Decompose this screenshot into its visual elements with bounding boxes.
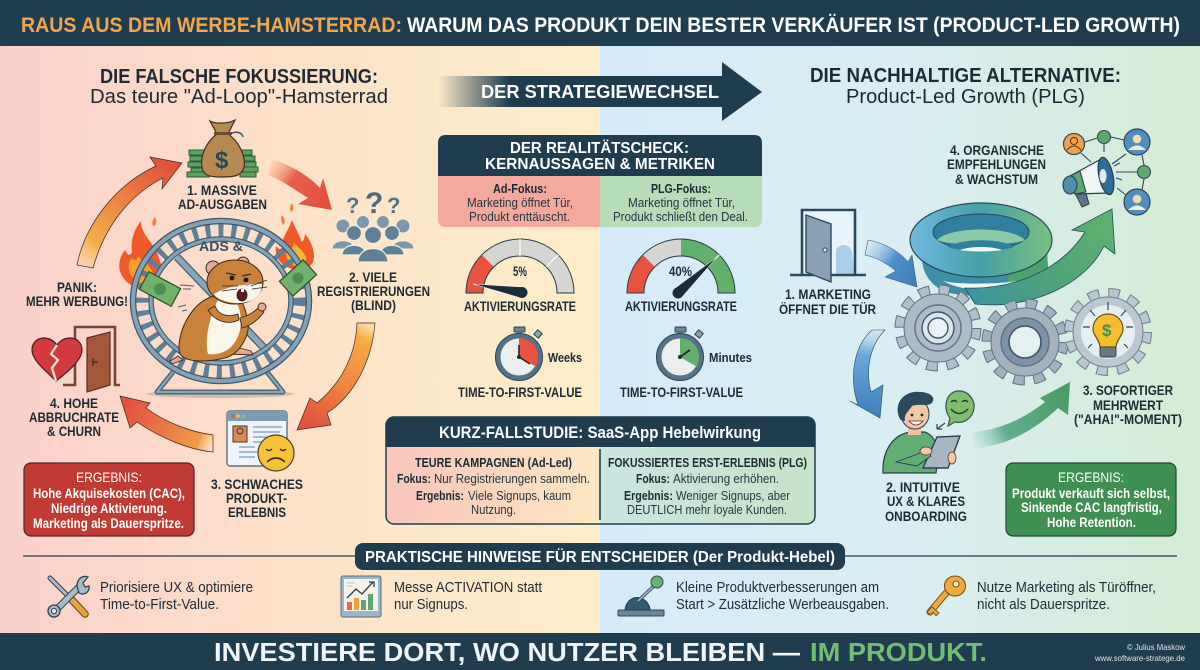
right panel heading: Product-Led Growth (PLG) (846, 86, 1085, 108)
column: PLG focus: PLG-Fokus: (651, 182, 711, 196)
label: step 4 organic growth: & WACHSTUM (955, 171, 1038, 187)
stopwatch: minutes (620, 327, 752, 400)
tip 1: tools: Priorisiere UX & optimiere (100, 580, 253, 596)
gear 3 with light bulb: $ (1102, 321, 1112, 340)
label: step 2 onboarding: 2. INTUITIVE (886, 479, 960, 495)
label: step 3 aha moment (1074, 382, 1182, 427)
wheel stand (146, 372, 294, 398)
tip 3: product lever (618, 576, 889, 616)
icon: open exit door (63, 327, 120, 392)
label: step 4 organic growth: EMPFEHLUNGEN (947, 156, 1046, 172)
icon: crowd with question marks: ? (365, 187, 383, 220)
stopwatch: weeks (458, 327, 582, 400)
column: PLG focus: Marketing öffnet Tür, (628, 196, 735, 210)
gauge: activation 40%: 40% (669, 264, 692, 279)
icon: key (927, 576, 966, 616)
callout: result right: Sinkende CAC langfristig, (1021, 500, 1162, 515)
gauge: activation 5%: AKTIVIERUNGSRATE (464, 298, 576, 314)
background: right side (600, 0, 1200, 670)
tip 1: tools: Time-to-First-Value. (100, 597, 219, 613)
icon: crowd with question marks: ? (387, 193, 400, 218)
callout: result left: ERGEBNIS: (76, 469, 142, 485)
background: left side (0, 0, 600, 670)
case study right column: Fokus: (636, 472, 670, 486)
case study header: KURZ-FALLSTUDIE: SaaS-App Hebelwirkung (439, 424, 761, 442)
case study right column (600, 446, 815, 524)
label: step 1: AD-AUSGABEN (178, 196, 267, 212)
arrow: gears to onboarding (850, 330, 885, 418)
spiral ring and growth arrow (910, 203, 1115, 305)
stopwatch: minutes: TIME-TO-FIRST-VALUE (620, 384, 743, 400)
label: step 4: & CHURN (47, 423, 101, 439)
case study left column: Fokus: (397, 472, 431, 486)
label: step 2 onboarding (885, 479, 967, 524)
label: step 2: 2. VIELE (349, 269, 397, 285)
heading: practical tips (355, 543, 845, 570)
case study right column: FOKUSSIERTES ERST-ERLEBNIS (PLG) (608, 456, 807, 470)
left panel heading: Das teure "Ad-Loop"-Hamsterrad (90, 86, 388, 108)
icon: crowd with question marks: ? (346, 193, 359, 218)
callout: result left: Marketing als Dauerspritze. (33, 516, 184, 531)
right panel heading (810, 65, 1121, 108)
icon: person with tablet (883, 392, 960, 473)
label: step 2: REGISTRIERUNGEN (317, 283, 430, 299)
case study left column: Nur Registrierungen sammeln. (434, 472, 590, 486)
panel: reality check (438, 135, 762, 227)
label: step 1 (178, 182, 267, 212)
icon: smiley speech bubble (937, 391, 974, 429)
label: step 3 (211, 476, 303, 520)
case study left column: Viele Signups, kaum (468, 489, 571, 503)
label: step 2 (317, 269, 430, 313)
label: step 3: ERLEBNIS (228, 504, 286, 520)
gauge: activation 40%: AKTIVIERUNGSRATE (625, 298, 737, 314)
icon: money bag (187, 120, 258, 177)
hamster wheel (133, 221, 309, 398)
icon: crowd with question marks (332, 187, 414, 262)
icon: broken heart (32, 338, 82, 381)
column: ad focus: Produkt enttäuscht. (469, 210, 570, 224)
gauge: activation 40% (625, 239, 737, 314)
footer slogan green: IM PRODUKT. (810, 639, 987, 667)
arrow: ad spend to signups (268, 159, 332, 210)
arrow: onboarding to value (973, 382, 1070, 448)
label: step 3: PRODUKT- (226, 490, 287, 506)
icon: flying banknote left (139, 272, 181, 306)
callout: result right: Produkt verkauft sich selbst, (1012, 486, 1170, 501)
callout: result left: Hohe Akquisekosten (CAC), (33, 486, 185, 501)
column: PLG focus: Produkt schließt den Deal. (613, 210, 748, 224)
panel header: KERNAUSSAGEN & METRIKEN (485, 156, 715, 173)
stopwatch: minutes: Minutes (709, 350, 752, 365)
label: step 4: ABBRUCHRATE (29, 409, 119, 425)
column: ad focus (438, 176, 600, 227)
label: step 1 marketing: ÖFFNET DIE TÜR (779, 301, 876, 317)
tip 3: product lever: Start > Zusätzliche Werbeausgaben. (676, 597, 889, 613)
arrow: panic to ad spend (77, 157, 182, 268)
arrow: weak product to churn (120, 396, 213, 452)
label: step 2 onboarding: UX & KLARES (887, 493, 965, 509)
title bar (0, 0, 1200, 46)
label: step 4: 4. HOHE (50, 395, 98, 411)
label: step 3 aha moment: 3. SOFORTIGER (1083, 382, 1173, 398)
case study right column: Weniger Signups, aber (676, 489, 790, 503)
copyright: © Julius Maskow (1127, 642, 1186, 652)
copyright: www.software-stratege.de (1094, 653, 1185, 663)
case study left column: Nutzung. (471, 503, 516, 517)
column: ad focus: Marketing öffnet Tür, (467, 196, 573, 210)
icon: flying banknote right (279, 260, 317, 296)
label: step 1: 1. MASSIVE (187, 182, 257, 198)
tip 2: measure activation: Messe ACTIVATION statt (394, 580, 542, 596)
footer slogan white: INVESTIERE DORT, WO NUTZER BLEIBEN — (214, 639, 801, 667)
tip 2: measure activation: nur Signups. (394, 597, 468, 613)
case study right column: Aktivierung erhöhen. (673, 472, 779, 486)
gears group (901, 291, 1146, 379)
panel header: DER REALITÄTSCHECK: (510, 140, 689, 157)
callout: result left (24, 463, 194, 536)
icon: flame left (119, 217, 163, 287)
case study left column: Ergebnis: (416, 489, 464, 503)
gear 2 (988, 305, 1062, 379)
gauge: activation 5%: 5% (513, 264, 527, 279)
label: step 3: 3. SCHWACHES (211, 476, 303, 492)
tip 3: product lever: Kleine Produktverbesserungen am (676, 580, 879, 596)
icon: lever (618, 576, 664, 616)
case study left column (386, 446, 600, 524)
label: step 3 aha moment: ("AHA!"-MOMENT) (1074, 411, 1182, 427)
label: step 1 marketing (779, 286, 876, 317)
callout: result right (1006, 463, 1176, 536)
stopwatch: weeks: TIME-TO-FIRST-VALUE (458, 384, 582, 400)
icon: flame right (276, 203, 314, 270)
left panel heading (90, 66, 388, 108)
callout: result right: Hohe Retention. (1047, 515, 1136, 530)
gear 3 with light bulb (1070, 294, 1146, 370)
right panel heading: DIE NACHHALTIGE ALTERNATIVE: (810, 65, 1121, 87)
label: step 2 onboarding: ONBOARDING (885, 508, 967, 524)
copyright (1094, 642, 1186, 663)
icon: tools (48, 576, 89, 617)
icon: bad product window (227, 411, 294, 471)
label: step 1 marketing: 1. MARKETING (785, 286, 871, 302)
label: panic (26, 279, 128, 309)
tip 2: measure activation (341, 576, 542, 617)
gauge: activation 5% (464, 239, 576, 314)
tip 4: key: nicht als Dauerspritze. (977, 597, 1110, 613)
column: PLG focus (600, 176, 762, 227)
label: step 4 organic growth (947, 142, 1046, 187)
growth arrow (965, 209, 1115, 305)
icon: network with megaphone (1063, 129, 1150, 215)
case study header (386, 417, 815, 447)
column: ad focus: Ad-Fokus: (493, 182, 547, 196)
arrow: strategy shift (438, 62, 762, 121)
panel header (438, 135, 762, 176)
case study left column: TEURE KAMPAGNEN (Ad-Led) (415, 456, 572, 470)
tip 1: tools (48, 576, 253, 617)
arrow: strategy shift: DER STRATEGIEWECHSEL (481, 81, 719, 102)
icon: open door (790, 210, 866, 282)
icon: money bag: $ (215, 147, 229, 174)
hamster (170, 257, 267, 364)
icon: chart board (341, 576, 381, 617)
label: step 2: (BLIND) (351, 297, 396, 313)
label: step 4 organic growth: 4. ORGANISCHE (950, 142, 1044, 158)
left panel heading: DIE FALSCHE FOKUSSIERUNG: (100, 66, 378, 88)
label: panic: PANIK: (57, 279, 97, 295)
stopwatch: weeks: Weeks (548, 350, 582, 365)
callout: result right: ERGEBNIS: (1058, 469, 1124, 485)
panel: case study (386, 417, 815, 524)
label: panic: MEHR WERBUNG! (26, 293, 128, 309)
label: step 3 aha moment: MEHRWERT (1093, 397, 1163, 413)
case study right column: Ergebnis: (624, 489, 673, 503)
label: step 4 (29, 395, 119, 439)
callout: result left: Niedrige Aktivierung. (51, 501, 167, 516)
case study right column: DEUTLICH mehr loyale Kunden. (627, 503, 787, 517)
tip 4: key (927, 576, 1156, 616)
footer bar (0, 633, 1200, 670)
arrow: signups to weak product (297, 323, 375, 430)
title: orange part: RAUS AUS DEM WERBE-HAMSTERRAD: (21, 14, 402, 37)
heading: practical tips: PRAKTISCHE HINWEISE FÜR ENTSCHEIDER (Der Produkt-Hebel) (365, 547, 835, 566)
gear 1 (901, 291, 975, 365)
label: ads on wheel: ADS & (199, 238, 243, 254)
tip 4: key: Nutze Marketing als Türöffner, (977, 580, 1156, 596)
arrow: door to gears (865, 240, 917, 287)
